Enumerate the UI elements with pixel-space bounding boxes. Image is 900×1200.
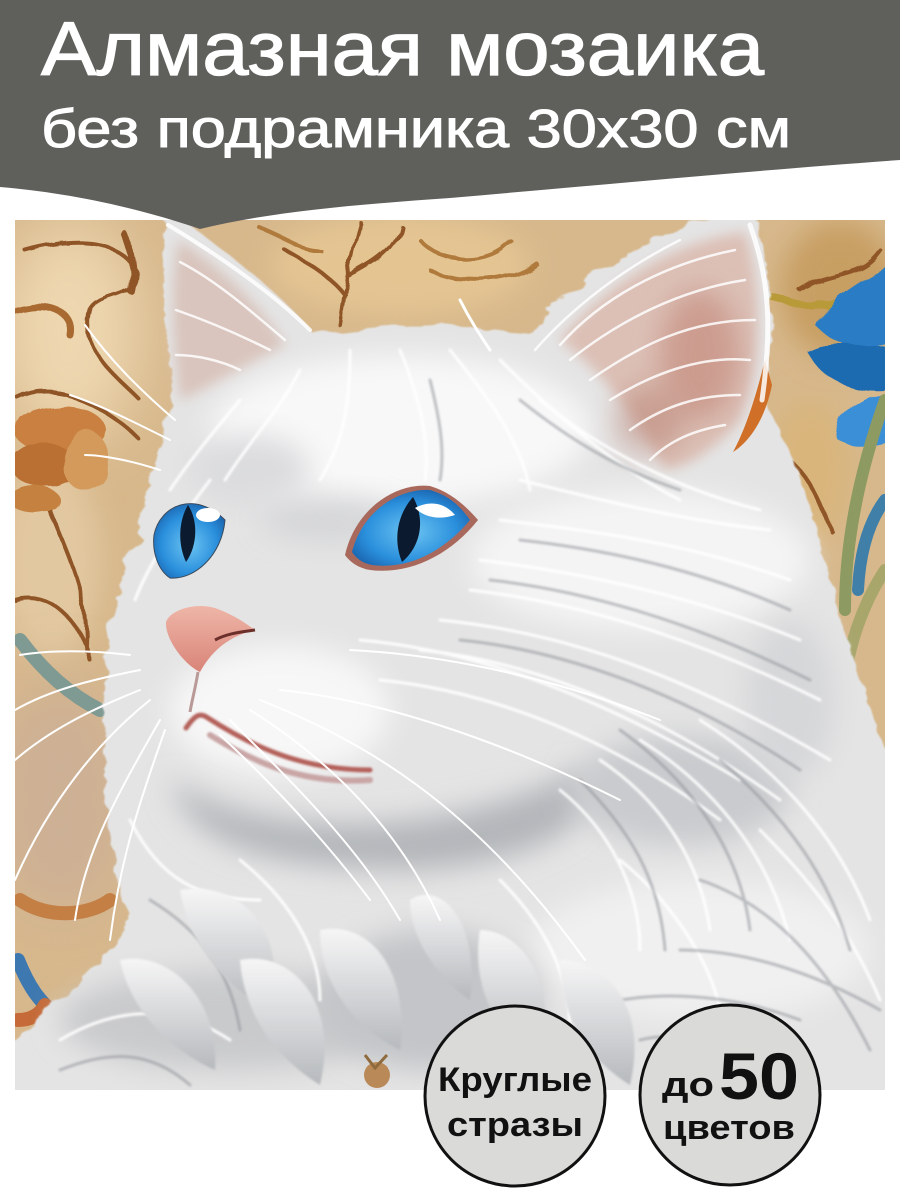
icon: blue flower — [807, 267, 885, 447]
header banner — [0, 0, 900, 229]
badge: up to 50 colours: до — [662, 1066, 714, 1104]
chest tufts — [120, 889, 635, 1085]
mouth — [186, 715, 370, 781]
badge: up to 50 colours — [640, 1005, 820, 1185]
icon: collar pendant — [364, 1055, 390, 1088]
title: Алмазная мозаика — [41, 7, 765, 92]
cat body and head — [0, 205, 900, 1130]
icon: nose — [166, 606, 255, 712]
painted floral background — [0, 215, 900, 1090]
badge: up to 50 colours: 50 — [719, 1039, 799, 1113]
subtitle: без подрамника 30х30 см — [41, 99, 791, 159]
green leaves — [18, 400, 885, 1020]
ear hair — [168, 225, 768, 460]
whiskers — [15, 300, 660, 960]
cat silhouette — [0, 205, 900, 1130]
badge: up to 50 colours: цветов — [663, 1109, 795, 1147]
icon: right eye — [345, 486, 478, 571]
fur shading — [60, 355, 870, 1070]
fur strands — [60, 350, 880, 1040]
badge: round rhinestones: стразы — [447, 1106, 583, 1144]
cat picture — [0, 205, 900, 1130]
badge: round rhinestones: Круглые — [438, 1061, 592, 1099]
icon: orange flower — [10, 406, 109, 514]
ear interiors — [173, 232, 772, 470]
icon: left eye — [154, 504, 225, 578]
badge: round rhinestones — [425, 1006, 605, 1186]
